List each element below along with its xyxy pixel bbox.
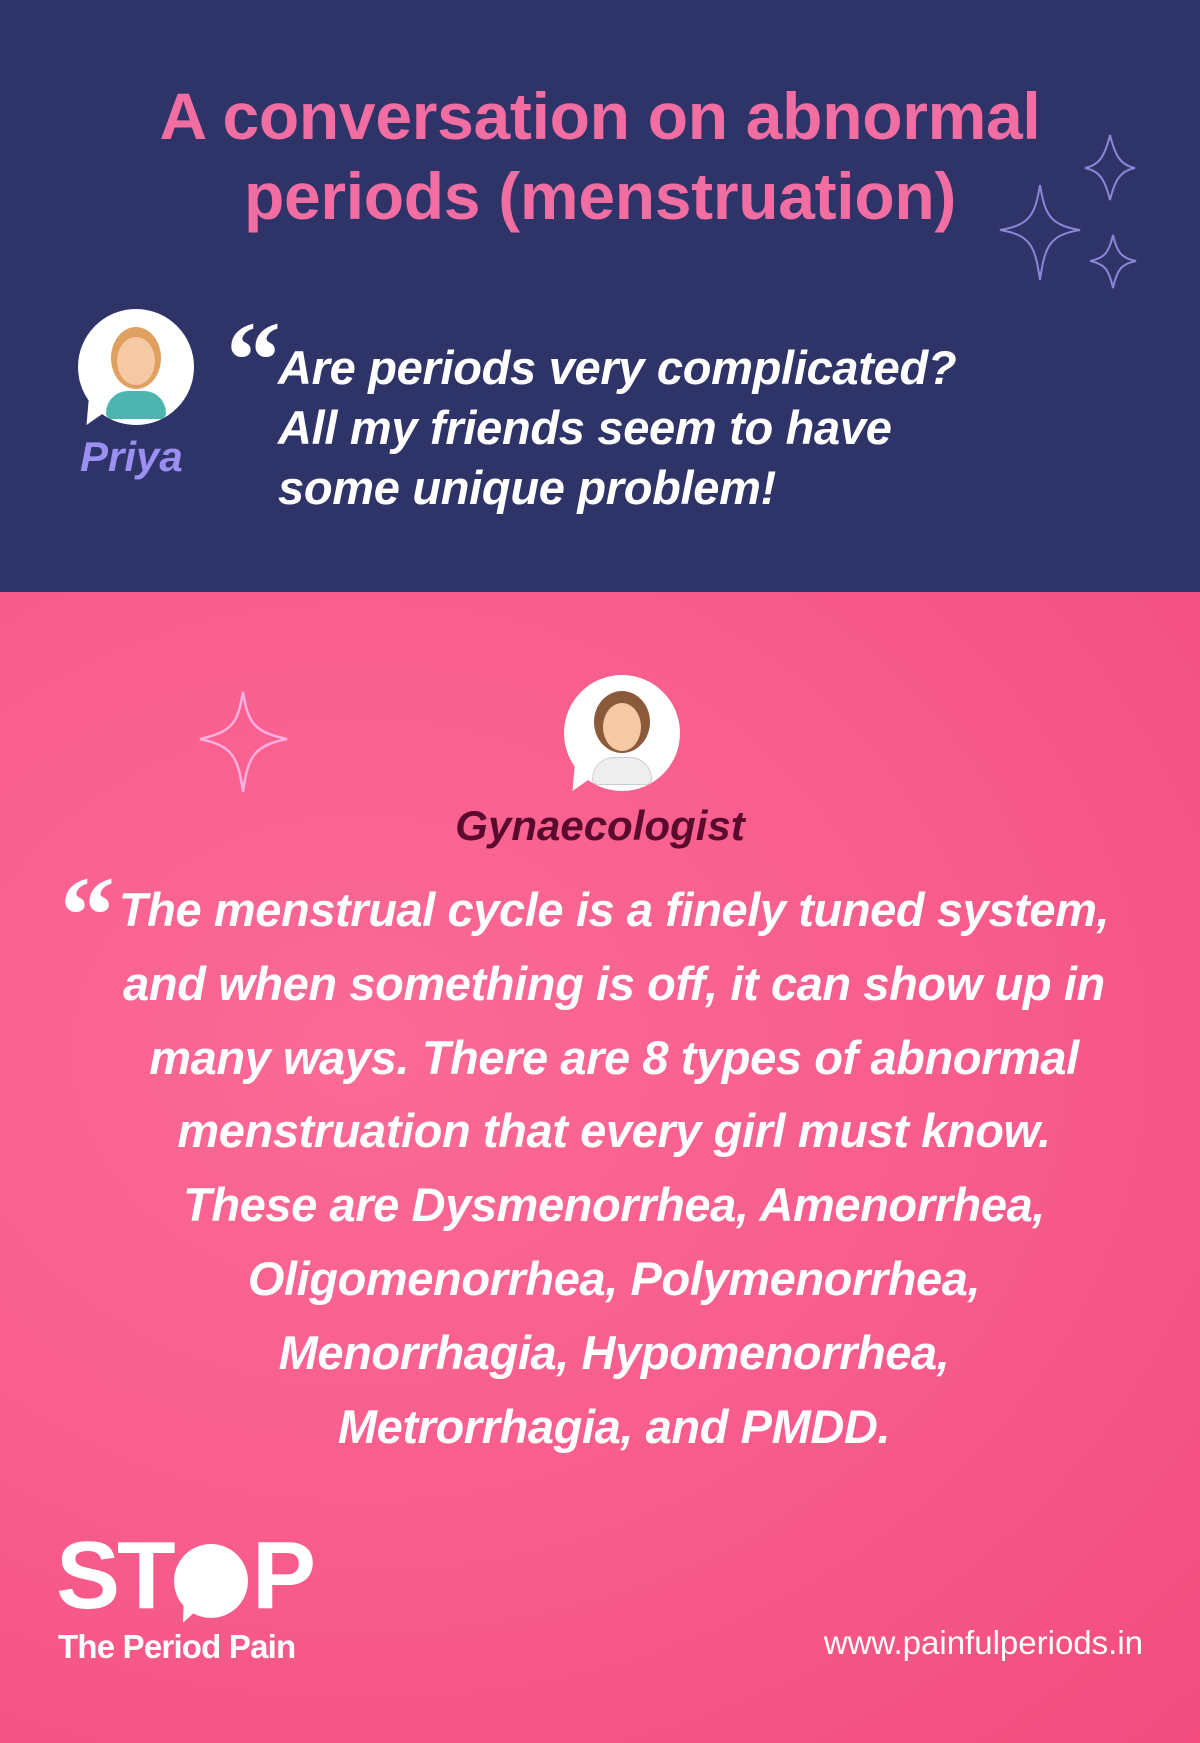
text: gynaecologist answer: Metrorrhagia, and PMDD. xyxy=(338,1400,890,1453)
title: periods (menstruation) xyxy=(244,159,956,233)
text: gynaecologist answer: Oligomenorrhea, Polymenorrhea, xyxy=(248,1252,980,1305)
text: Priya question: Are periods very complicated? xyxy=(278,341,956,394)
panel: question section xyxy=(0,0,1200,592)
text: Priya question xyxy=(277,341,956,514)
logo: STOP The Period Pain xyxy=(56,1522,316,1665)
text: gynaecologist answer: Menorrhagia, Hypomenorrhea, xyxy=(279,1326,949,1379)
logo: STOP The Period Pain: P xyxy=(252,1522,316,1629)
text: gynaecologist answer: The menstrual cycle is a finely tuned system, xyxy=(119,883,1109,936)
icon: quote mark: “ xyxy=(60,854,115,976)
text: Priya question: All my friends seem to have xyxy=(278,401,892,454)
panel: answer section xyxy=(0,592,1200,1743)
icon: gynaecologist avatar xyxy=(564,675,680,791)
label: Gynaecologist: Gynaecologist xyxy=(455,802,745,849)
icon: sparkles top right xyxy=(1000,134,1136,288)
text: website url: www.painfulperiods.in xyxy=(824,1624,1143,1661)
label: Priya: Priya xyxy=(80,433,183,480)
title: A conversation on abnormal xyxy=(160,79,1040,153)
icon: Priya avatar xyxy=(78,309,194,425)
text: Priya question: some unique problem! xyxy=(278,461,776,514)
logo: STOP The Period Pain: The Period Pain xyxy=(58,1628,295,1665)
text: gynaecologist answer xyxy=(119,883,1109,1453)
icon: sparkle left xyxy=(200,692,288,792)
logo: STOP The Period Pain: ST xyxy=(56,1522,173,1629)
text: gynaecologist answer: These are Dysmenorrhea, Amenorrhea, xyxy=(183,1178,1045,1231)
icon: quote mark: “ xyxy=(226,299,281,421)
text: gynaecologist answer: many ways. There are 8 types of abnormal xyxy=(149,1031,1079,1084)
text: gynaecologist answer: and when something is off, it can show up in xyxy=(123,957,1105,1010)
title xyxy=(160,79,1040,233)
text: gynaecologist answer: menstruation that every girl must know. xyxy=(177,1104,1051,1157)
